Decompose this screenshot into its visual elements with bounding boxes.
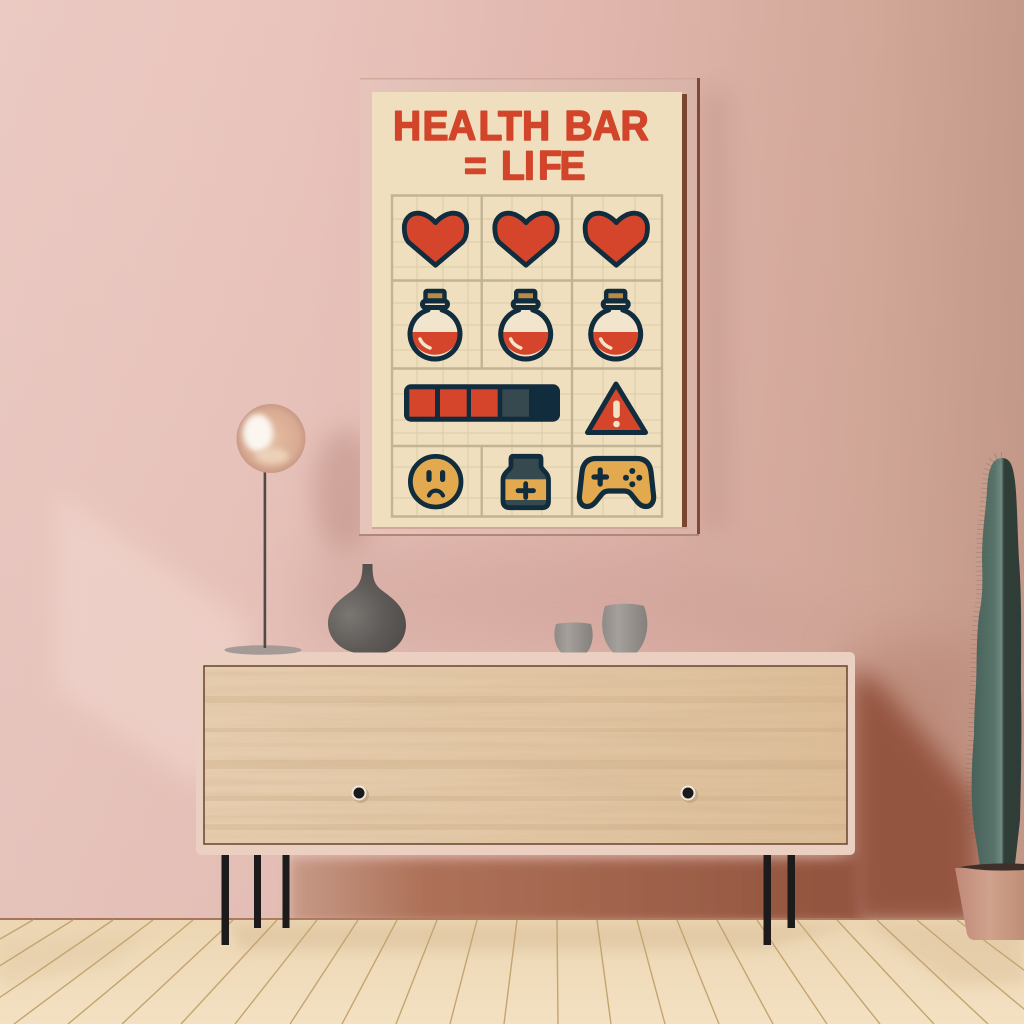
- icon: potion flask 3: [591, 291, 641, 359]
- drawer knob left: [352, 786, 369, 803]
- sideboard: [196, 652, 855, 945]
- poster frame: [359, 78, 700, 536]
- drawer knob right: [680, 786, 698, 803]
- health bar: [404, 384, 560, 422]
- title line 1: HEALTH BAR: [393, 102, 649, 149]
- sideboard frame: [196, 652, 855, 855]
- potted cactus: [955, 458, 1024, 940]
- cactus body: [972, 458, 1021, 873]
- table lamp: [224, 404, 306, 655]
- lamp pole: [264, 472, 266, 648]
- lamp base: [224, 645, 302, 655]
- icon: heart 1: [404, 213, 467, 265]
- icon: potion flask 1: [410, 291, 460, 359]
- title line 2: = LIFE: [464, 144, 586, 189]
- poster paper: [372, 92, 682, 527]
- sideboard legs: [222, 855, 795, 945]
- small cup: [554, 622, 593, 652]
- icon: sad face: [410, 456, 461, 507]
- icon: warning triangle: [588, 384, 646, 432]
- icon: game controller: [579, 458, 654, 506]
- tall cup: [602, 604, 647, 652]
- title: [393, 102, 649, 189]
- icon: heart 3: [585, 213, 648, 265]
- sideboard drawer: [204, 666, 847, 844]
- dark teardrop vase: [328, 564, 406, 652]
- icon: heart 2: [495, 213, 557, 265]
- icon: medicine bottle: [503, 456, 548, 508]
- icon: potion flask 2: [501, 291, 551, 359]
- wooden floor: [0, 918, 1024, 1024]
- framed poster: [359, 78, 700, 536]
- icon grid: [392, 195, 662, 517]
- terracotta pot: [955, 863, 1024, 940]
- lamp globe: [236, 404, 306, 473]
